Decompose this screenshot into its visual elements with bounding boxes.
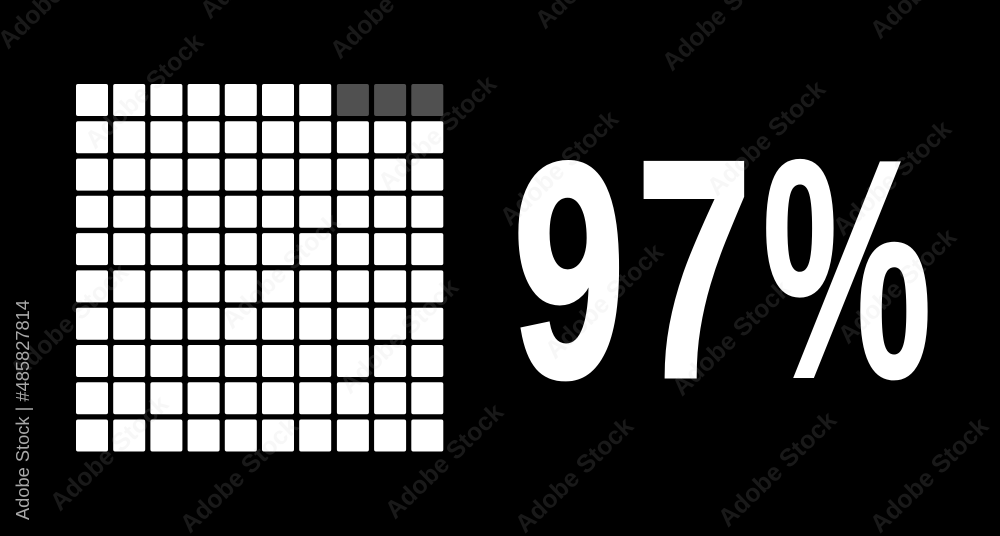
row 4	[76, 196, 443, 228]
stock id label, vertical: Adobe Stock | #485827814	[13, 300, 33, 520]
watermarks: Adobe Stock	[175, 412, 304, 536]
watermarks: Adobe Stock	[80, 28, 209, 154]
row 3	[76, 159, 443, 191]
watermarks: Adobe Stock	[540, 238, 669, 364]
digit 7: 7	[636, 95, 752, 444]
watermarks: Adobe Stock	[373, 70, 502, 196]
watermarks: Adobe Stock	[335, 273, 464, 399]
watermarks: Adobe Stock	[713, 406, 842, 532]
watermarks: Adobe Stock	[217, 208, 346, 334]
row 5	[76, 233, 443, 265]
watermarks: Adobe Stock	[5, 258, 134, 384]
watermarks: Adobe Stock	[865, 412, 994, 536]
row 2	[76, 121, 443, 153]
digit 9: 9	[513, 100, 625, 441]
watermarks: Adobe Stock	[510, 412, 639, 536]
watermarks: Adobe Stock	[833, 223, 962, 349]
watermarks: Adobe Stock	[702, 75, 831, 201]
row 10	[76, 420, 443, 452]
watermarks: Adobe Stock	[667, 275, 796, 401]
big percentage figure	[513, 95, 932, 444]
waffle chart: 97 of 100 filled	[76, 84, 443, 452]
row 7	[76, 308, 443, 340]
watermarks: Adobe Stock	[828, 115, 957, 241]
watermarks: Adobe Stock	[495, 105, 624, 231]
row 8	[76, 345, 443, 377]
row 1: seven filled, three unfilled	[76, 84, 443, 116]
row 6	[76, 270, 443, 302]
percent sign: %	[762, 95, 932, 443]
watermarks: Adobe Stock	[380, 398, 509, 524]
watermarks: Adobe Stock	[45, 390, 174, 516]
row 9	[76, 382, 443, 414]
